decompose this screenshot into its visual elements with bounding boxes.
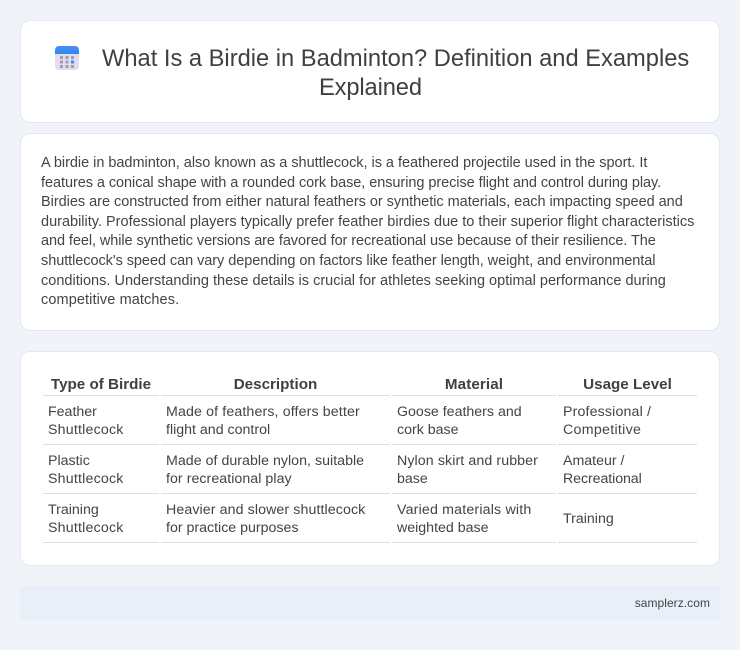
row: feather shuttlecock bbox=[48, 404, 651, 438]
row: training shuttlecock bbox=[48, 502, 614, 536]
text block: intro paragraph: durability. Professional players typically prefer feather birdies due to their superior flight characteristics bbox=[41, 214, 694, 230]
row: feather shuttlecock: cork base bbox=[397, 422, 459, 438]
text block: intro paragraph: Birdies are constructed from either natural feathers or synthetic materials, each impacting speed and bbox=[41, 194, 683, 210]
table: birdie types bbox=[43, 376, 697, 543]
row: training shuttlecock: Shuttlecock bbox=[48, 520, 124, 536]
row: feather shuttlecock: Competitive bbox=[563, 422, 641, 438]
row: plastic shuttlecock: Plastic bbox=[48, 453, 90, 469]
footer bar bbox=[20, 586, 720, 620]
footer text: samplerz.com bbox=[635, 596, 710, 610]
text block: intro paragraph: shuttlecock's speed can vary depending on factors like feather length, weight, and environmental bbox=[41, 253, 655, 269]
row: feather shuttlecock: Feather bbox=[48, 404, 97, 420]
panel: intro text bbox=[20, 133, 720, 331]
row: plastic shuttlecock: Made of durable nylon, suitable bbox=[166, 453, 364, 469]
table header: Description bbox=[234, 376, 317, 393]
row: training shuttlecock: Training bbox=[48, 502, 99, 518]
row: plastic shuttlecock bbox=[48, 453, 642, 487]
row: training shuttlecock: weighted base bbox=[397, 520, 488, 536]
row: training shuttlecock: Training bbox=[563, 511, 614, 527]
row: feather shuttlecock: flight and control bbox=[166, 422, 270, 438]
row: feather shuttlecock: Made of feathers, offers better bbox=[166, 404, 360, 420]
text block: intro paragraph: features a conical shape with a rounded cork base, ensuring precise flight and control during play. bbox=[41, 175, 661, 191]
row: training shuttlecock: for practice purposes bbox=[166, 520, 298, 536]
text block: intro paragraph: conditions. Understanding these details is crucial for athletes seeking optimal performance during bbox=[41, 273, 666, 289]
title: What Is a Birdie in Badminton? Definition and Examples bbox=[102, 46, 689, 72]
row: feather shuttlecock: Shuttlecock bbox=[48, 422, 124, 438]
row: plastic shuttlecock: base bbox=[397, 471, 428, 487]
row: training shuttlecock: Heavier and slower shuttlecock bbox=[166, 502, 365, 518]
row: plastic shuttlecock: Nylon skirt and rubber bbox=[397, 453, 538, 469]
text block: intro paragraph: competitive matches. bbox=[41, 292, 179, 308]
table header: Type of Birdie bbox=[51, 376, 151, 393]
row: plastic shuttlecock: for recreational play bbox=[166, 471, 292, 487]
row: feather shuttlecock: Professional / bbox=[563, 404, 651, 420]
table header: Material bbox=[445, 376, 503, 393]
text block: intro paragraph: A birdie in badminton, also known as a shuttlecock, is a feathered projectile used in the sport. It bbox=[41, 155, 647, 171]
title bbox=[102, 46, 689, 101]
icon: calendar bbox=[55, 46, 79, 70]
row: plastic shuttlecock: Amateur / bbox=[563, 453, 625, 469]
table header bbox=[51, 376, 672, 393]
title card bbox=[20, 20, 720, 123]
row: plastic shuttlecock: Recreational bbox=[563, 471, 642, 487]
row: plastic shuttlecock: Shuttlecock bbox=[48, 471, 124, 487]
table header: Usage Level bbox=[583, 376, 672, 393]
row: training shuttlecock: Varied materials with bbox=[397, 502, 531, 518]
text block: intro paragraph: and feel, while synthetic versions are favored for recreational use because of their resilience. The bbox=[41, 233, 656, 249]
text block: intro paragraph bbox=[41, 155, 694, 308]
row: feather shuttlecock: Goose feathers and bbox=[397, 404, 522, 420]
panel: table bbox=[20, 351, 720, 566]
title: Explained bbox=[319, 75, 422, 101]
